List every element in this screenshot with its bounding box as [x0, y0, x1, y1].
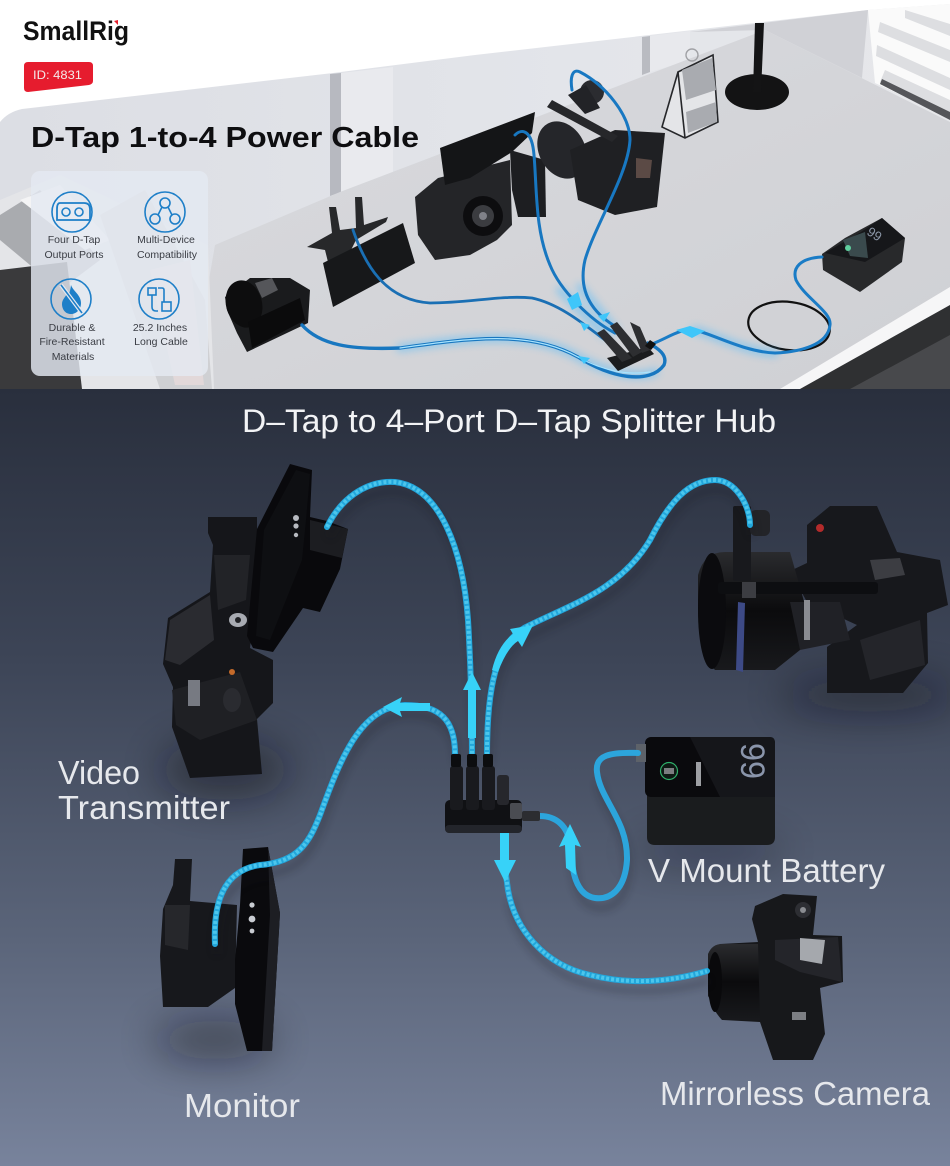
desk scene background: [0, 4, 950, 389]
icon: long cable: [139, 279, 179, 319]
text: multi-device compatibility: Compatibility: [137, 249, 198, 261]
monitor in scene: [307, 197, 415, 307]
arrow: up from battery: [559, 824, 581, 875]
caged camera in scene: [415, 112, 546, 260]
text: four D-Tap output ports: Four D-Tap: [48, 234, 100, 246]
arrow: left to monitor: [383, 697, 430, 717]
icon: multi-device: [145, 192, 185, 232]
label: mirrorless camera: Mirrorless Camera: [660, 1075, 931, 1112]
device: video transmitter on camera: [163, 464, 348, 778]
label: V mount battery: V Mount Battery: [648, 852, 885, 889]
title: product: D-Tap 1-to-4 Power Cable: [31, 122, 419, 154]
cable: to video transmitter: [327, 482, 472, 754]
blue cables and glow in scene: [302, 71, 830, 377]
text: multi-device compatibility: Multi-Device: [137, 234, 195, 246]
panel: connection diagram: [0, 389, 950, 1166]
panel: feature icons: [31, 171, 208, 376]
ID badge: ID: 4831: [33, 68, 82, 82]
arrow: up to video transmitter: [463, 672, 481, 738]
icon: fire resistant: [51, 279, 91, 319]
label: video transmitter: Transmitter: [58, 789, 230, 826]
battery in scene: 99: [864, 224, 885, 244]
cable: to monitor: [215, 705, 455, 944]
text: 25.2 inches long cable: 25.2 Inches: [133, 322, 187, 334]
black cable loop: [745, 297, 833, 355]
heading: splitter hub: D–Tap to 4–Port D–Tap Splitter Hub: [242, 403, 776, 439]
cable shadows: [217, 490, 752, 991]
hub in scene: [597, 322, 656, 371]
cable: to mirrorless camera: [503, 827, 707, 981]
books stack: [0, 175, 214, 389]
panel: top product photo: [0, 4, 950, 389]
battery in scene: [822, 218, 905, 292]
label: monitor: Monitor: [184, 1087, 300, 1124]
icon: desk lamp: [725, 23, 789, 110]
text: durable and fire-resistant: Durable &: [49, 322, 95, 334]
icon: calendar stand: [662, 49, 718, 138]
arrow: down to mirrorless camera: [494, 825, 516, 882]
text: durable and fire-resistant: Fire-Resistant: [39, 336, 105, 348]
cinema camera in scene: [528, 80, 665, 215]
label: video transmitter: Video: [58, 754, 140, 791]
device: monitor: [160, 847, 280, 1051]
device: V mount battery: [636, 737, 775, 845]
cable: to cinema camera: [487, 480, 750, 755]
device: cinema camera: [698, 506, 948, 693]
logo: SmallRig: [23, 16, 129, 46]
soft shadows: [155, 677, 950, 1060]
icon: four D-Tap ports: [52, 192, 92, 232]
text: 25.2 inches long cable: Long Cable: [134, 336, 188, 348]
text: battery percentage: 99: [733, 743, 771, 779]
icon: green status ring: [660, 762, 678, 780]
hub: four-port splitter: [445, 754, 540, 833]
text: four D-Tap output ports: Output Ports: [45, 249, 103, 261]
cable: battery to hub: [540, 753, 638, 898]
text: durable and fire-resistant: Materials: [52, 351, 94, 363]
device: mirrorless camera: [708, 894, 843, 1060]
small camera in scene: [220, 276, 310, 352]
ID badge: [24, 62, 93, 92]
arrow: up-right to cinema camera: [492, 625, 533, 672]
